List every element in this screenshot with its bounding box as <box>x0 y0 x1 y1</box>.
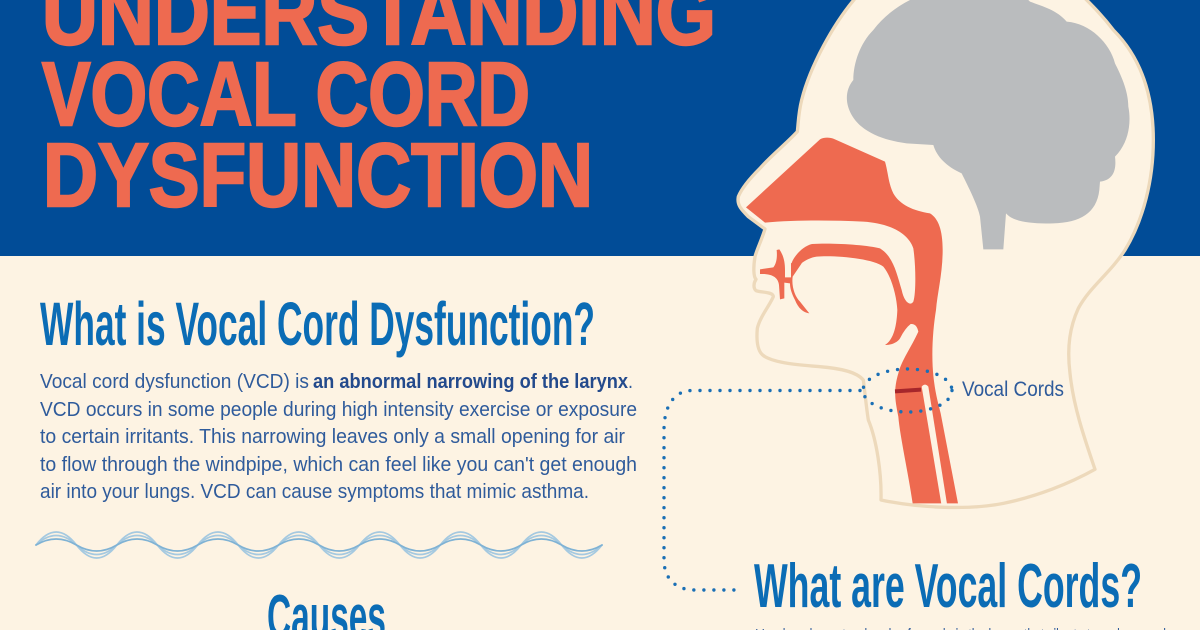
dotted connector <box>664 390 860 590</box>
definition paragraph: VCD occurs in some people during high intensity exercise or exposure <box>40 398 637 421</box>
definition paragraph: Vocal cord dysfunction (VCD) is <box>40 370 309 393</box>
header band <box>0 0 1200 256</box>
wave divider <box>36 532 602 558</box>
definition paragraph: . <box>628 370 633 393</box>
vocal cords band <box>895 390 921 391</box>
title: VOCAL CORD <box>42 45 530 145</box>
vocal cords label: Vocal Cords <box>962 378 1064 401</box>
head outline <box>738 0 1153 507</box>
dotted ellipse around vocal cords <box>863 369 952 412</box>
airway <box>746 138 958 503</box>
oesophagus gap <box>922 385 947 504</box>
brain <box>847 0 1130 249</box>
definition paragraph: to certain irritants. This narrowing leaves only a small opening for air <box>40 425 625 448</box>
title: DYSFUNCTION <box>43 126 593 226</box>
head illustration <box>738 0 1153 507</box>
mouth and lips <box>760 249 809 313</box>
title <box>42 0 716 226</box>
definition paragraph: an abnormal narrowing of the larynx <box>313 370 629 393</box>
heading: what is vocal cord dysfunction: What is Vocal Cord Dysfunction? <box>40 290 595 358</box>
definition paragraph <box>40 370 637 503</box>
definition paragraph: to flow through the windpipe, which can feel like you can't get enough <box>40 453 637 476</box>
definition paragraph: air into your lungs. VCD can cause symptoms that mimic asthma. <box>40 480 589 503</box>
